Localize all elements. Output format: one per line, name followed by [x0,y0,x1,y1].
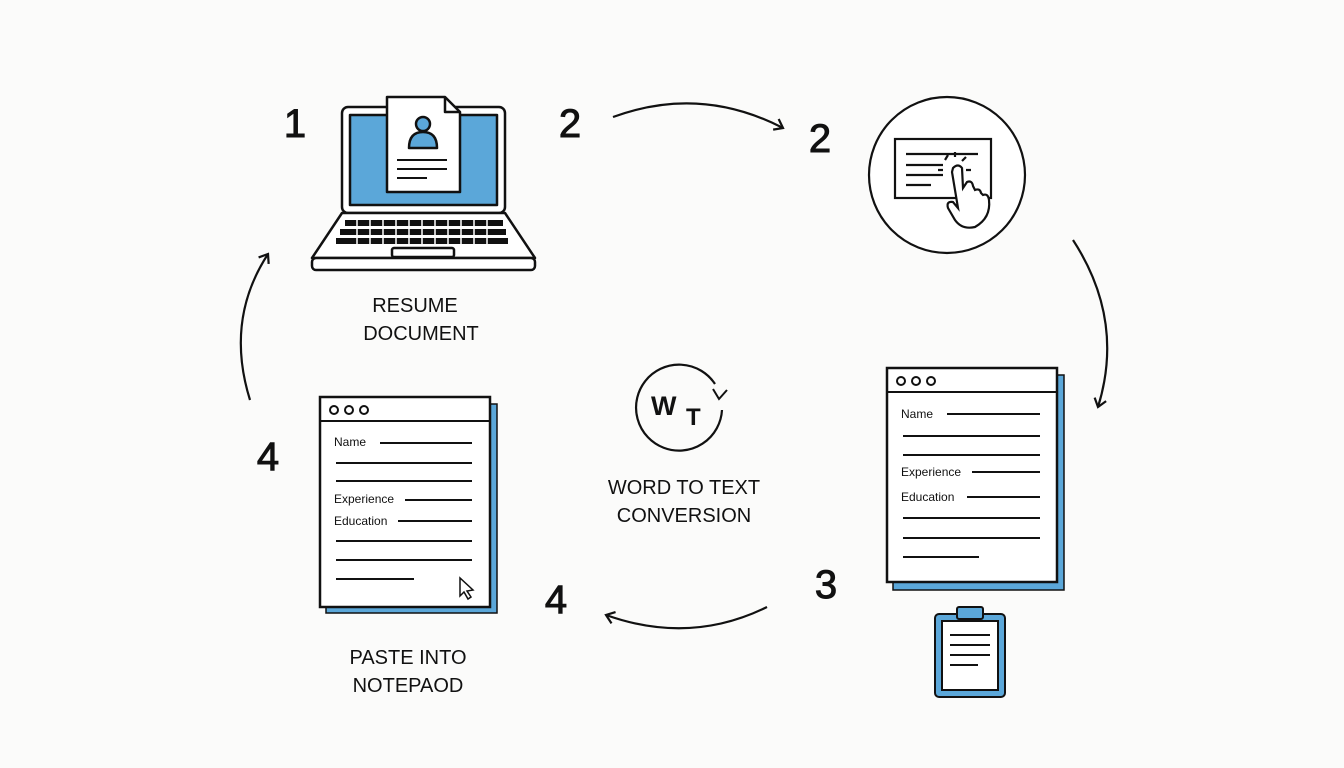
label: word to text conversion: WORD TO TEXT [608,477,760,499]
document: right with fields: Name [901,407,933,421]
step number 3: 3 [815,563,837,607]
step number 2 right: 2 [809,117,831,161]
document: left notepad: Experience [334,492,394,506]
icon: word to text conversion [636,365,727,451]
label: paste into notepad: PASTE INTO [349,647,467,669]
icon: laptop with resume [312,97,535,270]
step number 4 left: 4 [257,435,279,479]
step number 2: 2 [559,102,581,146]
icon: clipboard [935,607,1005,697]
icon: word to text conversion: T [686,404,701,431]
arrow: bottom [606,607,767,628]
icon: word to text conversion: W [651,391,677,421]
arrow: left [241,254,268,400]
label: word to text conversion: CONVERSION [617,505,751,527]
document: right with fields: Education [901,490,954,504]
document: right with fields [887,368,1064,590]
step number 4 bottom: 4 [545,578,567,622]
document: left notepad [320,397,497,613]
icon: circle with card and hand [869,97,1025,253]
document: right with fields: Experience [901,465,961,479]
arrow: top [613,103,783,128]
step number 1: 1 [284,102,306,146]
label: resume document: RESUME [372,295,458,317]
document: left notepad: Name [334,435,366,449]
arrow: right [1073,240,1107,407]
label: resume document: DOCUMENT [363,323,479,345]
label: paste into notepad: NOTEPAOD [353,675,463,697]
document: left notepad: Education [334,514,387,528]
